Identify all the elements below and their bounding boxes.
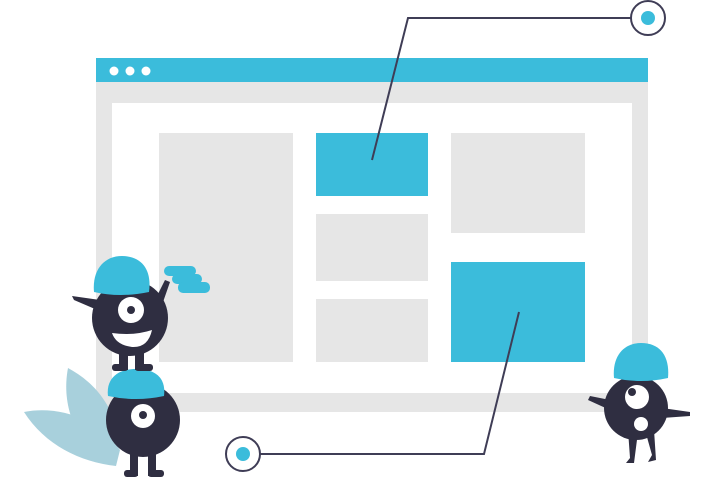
cloud held by monster [164, 266, 210, 293]
browser window [96, 58, 648, 412]
monster top [72, 256, 170, 371]
browser title bar [96, 58, 648, 82]
content blocks [159, 133, 585, 362]
monster bottom [106, 369, 180, 477]
monster right [588, 343, 690, 463]
callout line bottom [226, 312, 519, 471]
leaf plant [24, 368, 120, 466]
callout line top [372, 1, 665, 160]
